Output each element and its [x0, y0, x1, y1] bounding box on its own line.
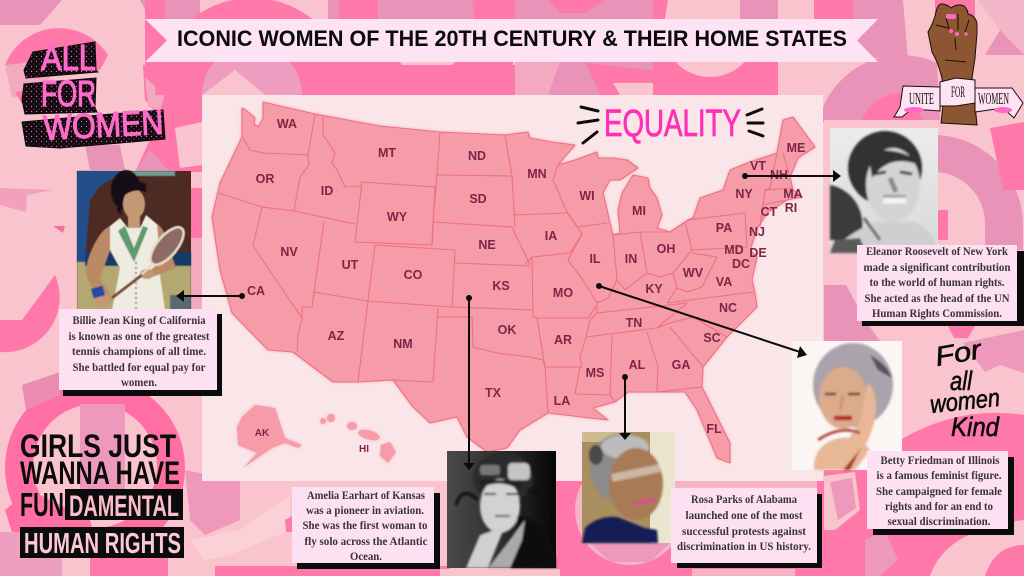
state labels: KY	[645, 282, 663, 296]
state labels: AL	[629, 358, 646, 372]
photo: Betty Friedan	[792, 341, 902, 470]
text box: Billie Jean King	[59, 309, 222, 396]
state labels: PA	[716, 221, 732, 235]
state labels: CT	[761, 205, 778, 219]
text box: Billie Jean King: She battled for equal pay for	[72, 362, 206, 374]
slogan: girls just wanna have fundamental human rights: HUMAN RIGHTS	[24, 528, 181, 560]
photo: Amelia Earhart	[447, 451, 556, 568]
state labels: MA	[783, 187, 803, 201]
text box: Eleanor Roosevelt: Human Rights Commission.	[872, 308, 1002, 320]
state labels: HI	[359, 444, 369, 455]
state labels: ME	[787, 141, 805, 155]
state labels: CO	[404, 268, 423, 282]
slogan: for all women kind: Kind	[951, 412, 1000, 442]
text box: Rosa Parks: successful protests against	[682, 526, 806, 538]
state labels: WI	[579, 189, 595, 203]
state labels: ND	[468, 149, 486, 163]
slogan: for all women kind	[929, 334, 1001, 442]
title text: ICONIC WOMEN OF THE 20TH CENTURY & THEIR HOME STATES	[177, 26, 847, 51]
equality heading: EQUALITY	[604, 103, 741, 145]
photo: Rosa Parks	[582, 432, 675, 543]
state labels: NH	[770, 168, 788, 182]
text box: Betty Friedan	[867, 451, 1014, 535]
text box: Betty Friedan: She campaigned for female	[876, 486, 1002, 498]
state labels: NV	[280, 245, 298, 259]
state labels: WY	[387, 210, 408, 224]
state labels: AK	[255, 428, 270, 439]
text box: Billie Jean King: Billie Jean King of California	[72, 315, 206, 327]
slogan: for all women kind: For	[933, 334, 984, 372]
photo: Billie Jean King	[77, 170, 191, 310]
state labels: TN	[626, 316, 642, 330]
background: bottom-middle band	[290, 455, 867, 576]
state labels: VA	[716, 275, 732, 289]
text box: Betty Friedan: sexual discrimination.	[888, 516, 991, 528]
text box: Betty Friedan: rights and for an end to	[885, 501, 993, 513]
icon: raised fist with unite for women banner	[894, 4, 1023, 125]
slogan: girls just wanna have fundamental human rights: WANNA HAVE	[20, 455, 180, 491]
text box: Betty Friedan: Betty Friedman of Illinois	[880, 455, 1000, 467]
text box: Eleanor Roosevelt: Eleanor Roosevelt of New York	[866, 246, 1009, 258]
logo: all for women: FOR	[41, 73, 96, 114]
text box: Eleanor Roosevelt	[857, 245, 1024, 326]
text box: Amelia Earhart: fly solo across the Atlantic	[304, 536, 428, 548]
state labels: MO	[553, 286, 573, 300]
state labels: IA	[545, 229, 557, 243]
slogan: for all women kind: all	[950, 366, 973, 396]
arrow: California to Billie Jean King	[176, 290, 245, 302]
text box: Amelia Earhart	[292, 487, 440, 569]
slogan: girls just wanna have fundamental human rights	[20, 428, 184, 560]
state labels: WA	[277, 117, 297, 131]
background: top ring band	[155, 0, 854, 133]
state labels: UT	[342, 258, 359, 272]
arrow: Alabama to Rosa Parks	[619, 374, 631, 440]
background: right-side rings	[823, 0, 1024, 576]
state labels: IL	[589, 252, 601, 266]
text box: Eleanor Roosevelt: She acted as the head of the UN	[864, 293, 1010, 305]
state labels: MT	[378, 146, 396, 160]
state labels: IN	[625, 252, 637, 266]
state labels: FL	[706, 422, 722, 436]
state labels: AZ	[328, 329, 345, 343]
state labels: LA	[554, 394, 570, 408]
text box: Billie Jean King: is known as one of the greatest	[68, 331, 210, 343]
state labels: NJ	[749, 225, 765, 239]
state labels: DC	[732, 257, 750, 271]
state labels: MD	[724, 243, 744, 257]
text box: Billie Jean King: tennis champions of all time.	[72, 346, 206, 358]
text box: Rosa Parks: launched one of the most	[686, 510, 803, 522]
background: lower-left ring	[0, 372, 292, 576]
text box: Rosa Parks: discrimination in US history.	[677, 541, 811, 553]
text box: Eleanor Roosevelt: made a significant contribution	[864, 262, 1011, 274]
state labels: MI	[632, 204, 646, 218]
state borders	[219, 114, 793, 413]
state labels: MN	[527, 167, 547, 181]
logo: all for women: ALL	[41, 37, 96, 78]
state labels: RI	[785, 201, 797, 215]
slogan: girls just wanna have fundamental human rights: GIRLS JUST	[20, 428, 176, 464]
arrow: New York to Eleanor Roosevelt	[742, 170, 841, 182]
text box: Amelia Earhart: She was the first woman to	[302, 520, 428, 532]
state labels: VT	[750, 159, 766, 173]
text box: Betty Friedan: is a famous feminist figure.	[876, 470, 1002, 482]
state labels: OR	[256, 172, 274, 186]
slogan: girls just wanna have fundamental human rights: FUN	[20, 486, 64, 523]
arrow: Illinois to Betty Friedan	[596, 283, 807, 358]
state labels: OK	[498, 323, 516, 337]
state labels: DE	[749, 246, 767, 260]
panel: map background	[202, 95, 823, 481]
state labels: NE	[478, 238, 496, 252]
logo: all for women	[22, 37, 165, 148]
state labels	[247, 117, 805, 455]
text box: Amelia Earhart: was a pioneer in aviation.	[306, 505, 424, 517]
state labels: KS	[492, 279, 510, 293]
text box: Amelia Earhart: Amelia Earhart of Kansas	[307, 490, 425, 502]
state labels: SD	[469, 192, 487, 206]
slogan: for all women kind: women	[929, 384, 1001, 419]
text box: Billie Jean King: women.	[121, 377, 157, 389]
arrow: Kansas to Amelia Earhart	[463, 295, 475, 470]
state labels: NM	[393, 337, 413, 351]
state labels: NC	[719, 301, 737, 315]
state labels: GA	[672, 358, 690, 372]
icon: raised fist with unite for women banner: FOR	[951, 84, 965, 101]
text box: Eleanor Roosevelt: to the world of human rights.	[870, 277, 1005, 289]
icon: emphasis rays	[578, 107, 763, 143]
state labels: MS	[586, 366, 604, 380]
photo: Eleanor Roosevelt	[830, 128, 938, 253]
state labels: WV	[683, 266, 704, 280]
state labels: NY	[735, 187, 753, 201]
US map	[212, 102, 815, 468]
title banner	[145, 19, 878, 62]
slogan: girls just wanna have fundamental human rights: DAMENTAL	[69, 490, 179, 523]
state labels: CA	[247, 284, 265, 298]
state labels: SC	[703, 331, 721, 345]
text box: Rosa Parks	[671, 488, 822, 568]
text box: Amelia Earhart: Ocean.	[350, 551, 382, 563]
state labels: OH	[657, 242, 675, 256]
state labels: AR	[554, 333, 572, 347]
state labels: ID	[321, 184, 333, 198]
state labels: TX	[485, 386, 502, 400]
icon: raised fist with unite for women banner: UNITE	[909, 89, 934, 108]
logo: all for women: WOMEN	[42, 103, 164, 148]
text box: Rosa Parks: Rosa Parks of Alabama	[691, 494, 797, 506]
